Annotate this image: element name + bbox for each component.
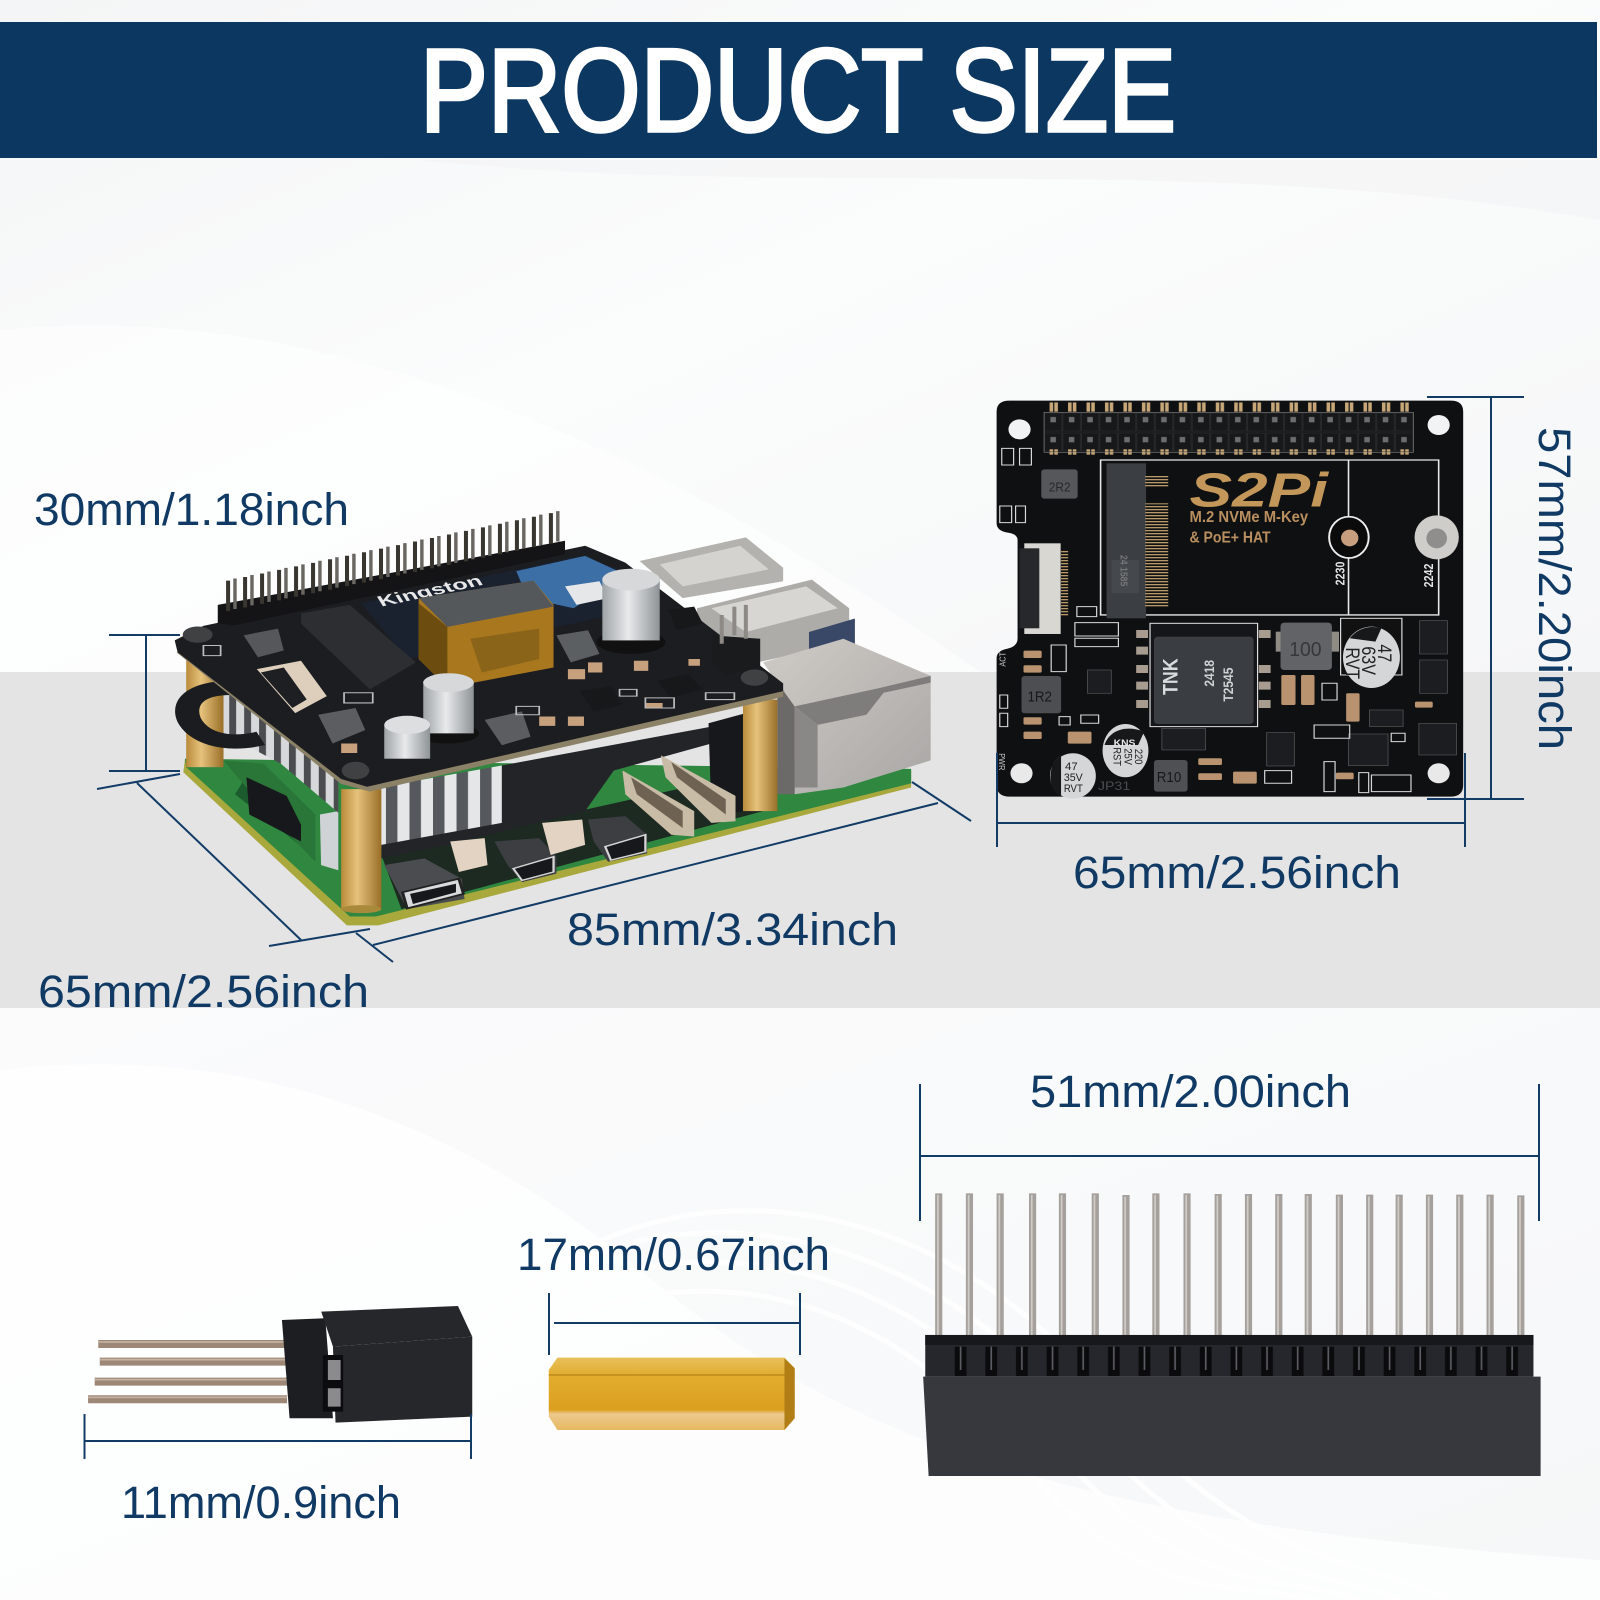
transformer: T2545 [1220, 668, 1236, 702]
transformer [1136, 623, 1271, 727]
capacitor 47 35V: RVT [1064, 782, 1083, 795]
label: 65mm depth: 65mm/2.56inch [38, 966, 369, 1017]
passive components [1023, 651, 1433, 784]
mounting holes [1008, 415, 1450, 783]
M.2 socket [301, 605, 416, 689]
capacitor 220 25V: 220 [1132, 749, 1144, 765]
inductor 100: 100 [1289, 638, 1322, 661]
inductor 2R2 [1041, 469, 1078, 499]
capacitor 220 25V: RST [1110, 747, 1122, 766]
label: 30mm: 30mm/1.18inch [34, 484, 349, 535]
FFC socket on HAT [257, 661, 327, 713]
panel: HAT top view [997, 401, 1463, 799]
label: 85mm: 85mm/3.34inch [567, 904, 898, 955]
silkscreen outlines [1000, 448, 1411, 793]
board connectors [320, 811, 647, 909]
panel: assembled Raspberry Pi stack with HAT [175, 511, 931, 925]
capacitor 47 63V [1341, 618, 1402, 688]
capacitor 47 63V: 47 [1373, 644, 1395, 662]
HAT board edge [176, 652, 783, 791]
dimension: 17mm [517, 1229, 830, 1355]
inductors and chips [203, 607, 734, 753]
label: 11mm: 11mm/0.9inch [121, 1477, 401, 1528]
Ethernet jack [763, 639, 931, 794]
dimension: 11mm [84, 1414, 471, 1528]
capacitor 47 35V: 47 [1065, 760, 1078, 773]
FFC connector [1020, 543, 1068, 634]
panel: small accessories [88, 1306, 795, 1430]
2x2 header body [282, 1306, 472, 1423]
SSD card [361, 556, 660, 659]
screws [183, 627, 768, 779]
capacitors [384, 569, 665, 759]
label: 65mm width: 65mm/2.56inch [1073, 847, 1401, 898]
JP31 silkscreen: JP31 [1098, 779, 1130, 793]
title banner [0, 22, 1597, 158]
gray backdrop band [0, 672, 1600, 1008]
dimension: 30mm height [34, 484, 349, 771]
transformer [419, 581, 554, 688]
heatsink and fan [378, 713, 746, 858]
transformer: TNK [1159, 658, 1183, 695]
label: 51mm: 51mm/2.00inch [1030, 1066, 1351, 1117]
title: PRODUCT SIZE [420, 25, 1176, 157]
pins [938, 1193, 1521, 1342]
GPIO header [1044, 402, 1413, 455]
capacitor 220 25V: KNS [1114, 739, 1136, 749]
capacitor 47 63V: 63V [1358, 646, 1379, 675]
panel: long stacking header [923, 1193, 1541, 1476]
inductor 2R2: 2R2 [1049, 481, 1071, 495]
capacitor 220 25V [1103, 724, 1148, 777]
label: 57mm: 57mm/2.20inch [1529, 427, 1580, 750]
product subtitle: & PoE+ HAT [1190, 529, 1271, 546]
Pi circuit board [183, 759, 911, 925]
standoffs [186, 656, 777, 913]
S2Pi logo: S2Pi [1190, 464, 1329, 518]
capacitor 47 63V: RVT [1342, 647, 1363, 679]
circuit board [997, 401, 1463, 797]
dimension: 65mm width [997, 753, 1465, 898]
product name: M.2 NVMe M-Key [1190, 508, 1309, 526]
silkscreen labels ACT PWR [997, 652, 1008, 771]
capacitor 47 35V: 35V [1064, 771, 1083, 784]
capacitor 220 25V: 25V [1121, 748, 1133, 765]
silkscreen labels ACT PWR: PWR [997, 753, 1007, 771]
M.2 socket [1107, 463, 1168, 618]
silkscreen labels ACT PWR: ACT [998, 652, 1008, 667]
screw 2242 [1415, 515, 1459, 587]
M.2 socket: 24 1585 [1117, 555, 1129, 587]
jumper header [711, 605, 760, 675]
HAT board [175, 546, 783, 787]
inductor R10: R10 [1157, 769, 1181, 786]
label: 17mm: 17mm/0.67inch [517, 1229, 830, 1280]
dimension: 57mm height [1427, 397, 1580, 799]
standoff hole 2230: 2230 [1334, 561, 1348, 585]
dimension: 85mm length [356, 782, 971, 962]
screw 2242: 2242 [1422, 563, 1436, 587]
USB ports [640, 537, 855, 662]
dimension: 51mm [920, 1066, 1539, 1221]
capacitor 47 35V [1050, 753, 1096, 799]
inductor 1R2 [1022, 676, 1061, 713]
inductor 1R2: 1R2 [1027, 689, 1052, 705]
inductor 100 [1276, 623, 1339, 670]
transformer: 2418 [1201, 660, 1217, 687]
hex standoff [549, 1358, 795, 1430]
SSD card: Kingston [374, 572, 486, 610]
GPIO stacking header [218, 511, 565, 625]
M.2 keepout outline [1101, 460, 1439, 615]
ribbon cable [187, 688, 261, 741]
FFC connectors [246, 755, 736, 842]
standoff hole 2230 [1329, 517, 1369, 585]
support chips [1088, 621, 1456, 766]
inductor R10 [1154, 760, 1188, 792]
socket body [923, 1335, 1541, 1476]
2x2 header pins [88, 1342, 290, 1399]
dimension: 65mm depth [38, 774, 370, 1017]
